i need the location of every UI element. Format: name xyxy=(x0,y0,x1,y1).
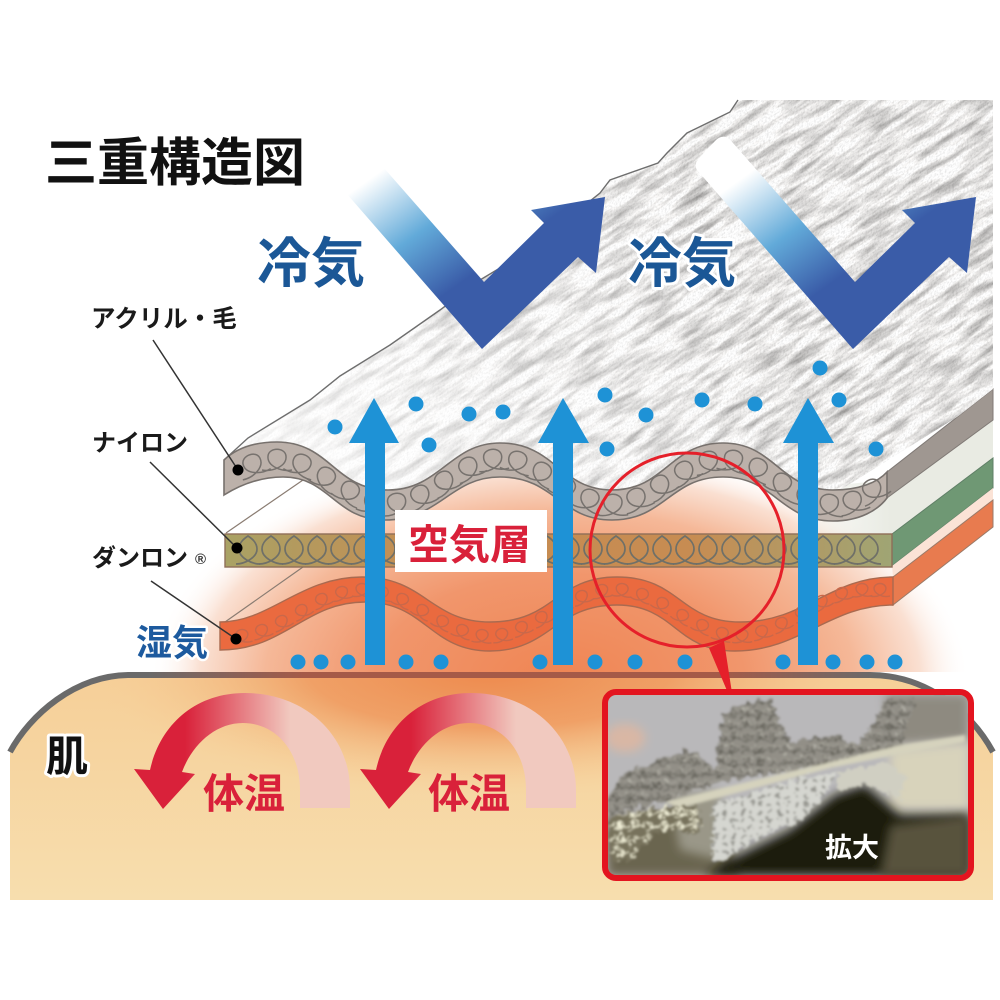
callout: danron xyxy=(92,544,242,644)
callout: nylon: ナイロン xyxy=(92,430,188,457)
layer: danron xyxy=(220,577,893,651)
side edge of layers xyxy=(225,389,993,622)
title: 三重構造図 xyxy=(45,135,305,193)
outer fabric surface xyxy=(224,100,993,490)
layer: acrylic and wool xyxy=(224,442,891,521)
body heat arrow: right xyxy=(360,693,576,809)
skin xyxy=(10,672,993,900)
magnifier circle with pointer xyxy=(590,453,784,693)
magnified photo xyxy=(605,692,971,878)
callout: nylon xyxy=(92,430,242,554)
label: moisture: 湿気 xyxy=(136,622,208,663)
label: body heat left: 体温 xyxy=(203,771,285,817)
callout: acrylic and wool: アクリル・毛 xyxy=(91,305,237,333)
label: air layer: 空気層 xyxy=(408,522,531,568)
warm air halo xyxy=(150,445,970,672)
label: magnified: 拡大 xyxy=(825,833,879,863)
label: body heat right: 体温 xyxy=(428,771,510,817)
cold air arrow: right xyxy=(696,137,976,349)
label: skin: 肌 xyxy=(46,733,88,780)
label: cold air left: 冷気 xyxy=(257,234,365,294)
cold air arrow: left xyxy=(325,137,605,349)
moisture arrows xyxy=(349,398,834,665)
callout: danron: ダンロン xyxy=(92,544,188,572)
callout: acrylic and wool xyxy=(91,305,244,476)
layer: nylon xyxy=(225,534,892,567)
callout: danron: ® xyxy=(195,551,206,568)
label: cold air right: 冷気 xyxy=(628,234,736,294)
body heat arrow: left xyxy=(134,693,350,809)
moisture dots xyxy=(290,360,902,670)
label: air layer xyxy=(395,510,547,572)
